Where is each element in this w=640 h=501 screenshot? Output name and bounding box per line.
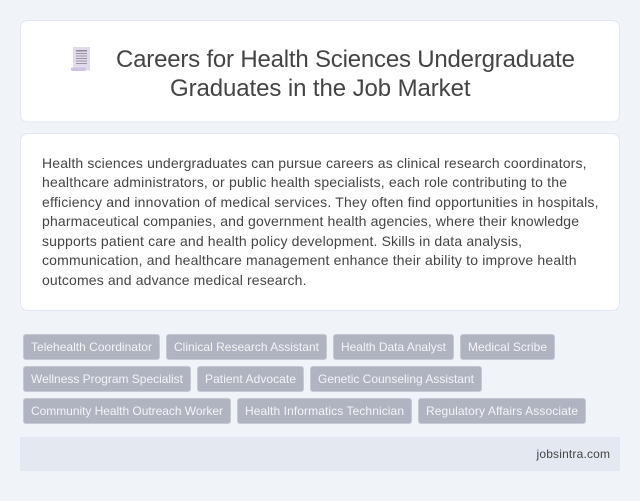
text block: description: outcomes and advance medical research. [42,272,306,288]
tag: Telehealth Coordinator [24,334,160,360]
panel: header card [20,20,620,122]
footer bar [20,437,620,471]
tag: Patient Advocate: Patient Advocate [205,372,296,386]
title: Careers for Health Sciences Undergraduate [116,46,575,73]
text block: description: supports patient care and health policy development. Skills in data analysis, [42,233,522,249]
tag: Patient Advocate [198,366,304,392]
tag: Regulatory Affairs Associate: Regulatory Affairs Associate [426,404,578,418]
footer source text: jobsintra.com [536,447,610,461]
text block: description: pharmaceutical companies, and government health agencies, where their knowledge [42,213,579,229]
text block: description: communication, and healthcare management enhance their ability to improve health [42,252,576,268]
text block: description [42,155,598,288]
title: Graduates in the Job Market [170,75,471,102]
tag: Wellness Program Specialist [24,366,190,392]
text block: description: healthcare administrators, or public health specialists, each role contributing to the [42,174,567,190]
title [116,46,575,102]
tag: Community Health Outreach Worker: Community Health Outreach Worker [31,404,223,418]
tag: Regulatory Affairs Associate [418,398,586,424]
tag: Medical Scribe: Medical Scribe [468,340,547,354]
panel: description card [20,134,620,310]
tag: Health Data Analyst: Health Data Analyst [341,340,447,354]
tag: Health Informatics Technician [238,398,412,424]
text block: description: Health sciences undergraduates can pursue careers as clinical research coordinators, [42,155,586,171]
tag: Telehealth Coordinator: Telehealth Coordinator [31,340,152,354]
tag: Genetic Counseling Assistant: Genetic Counseling Assistant [318,372,475,386]
tag: Genetic Counseling Assistant [310,366,482,392]
tag: Clinical Research Assistant: Clinical Research Assistant [174,340,320,354]
tag: Wellness Program Specialist: Wellness Program Specialist [31,372,184,386]
tag: Clinical Research Assistant [166,334,326,360]
tag: Community Health Outreach Worker [24,398,230,424]
icon: document scroll [71,47,90,71]
text block: description: efficiency and innovation of medical services. They often find opportunities in hospitals, [42,194,598,210]
tag: Health Data Analyst [334,334,454,360]
tag: Health Informatics Technician: Health Informatics Technician [245,404,404,418]
tag: Medical Scribe [460,334,554,360]
